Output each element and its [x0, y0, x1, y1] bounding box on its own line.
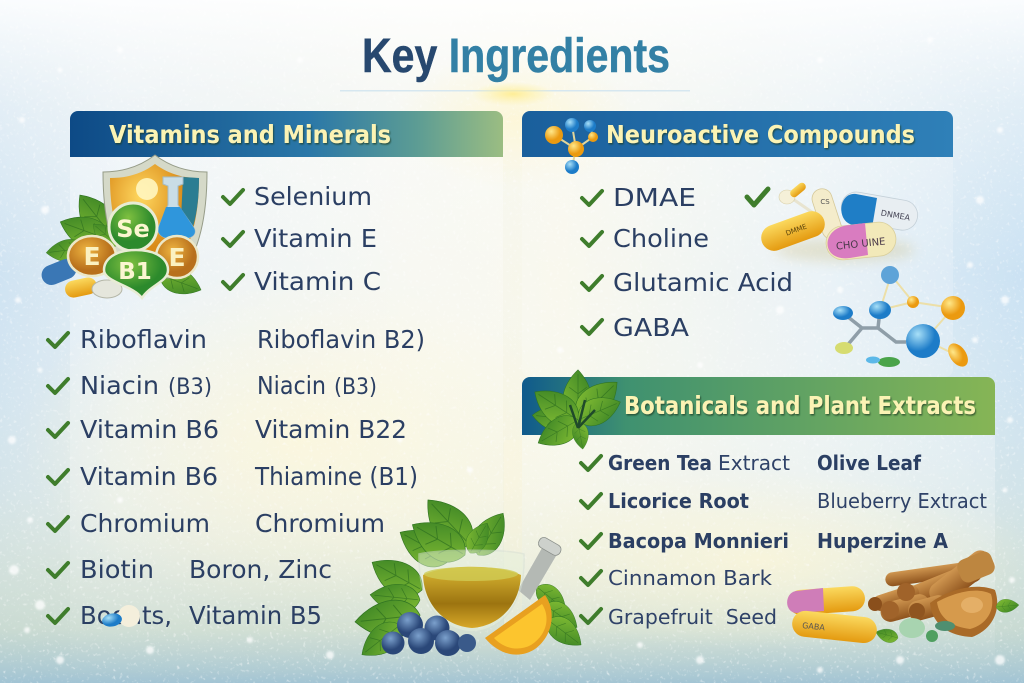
checklist: neuroactive: DMAE: [613, 183, 696, 212]
icon: capsules: CHO UINE: [835, 236, 886, 253]
heading: neuroactive compounds: Neuroactive Compounds: [606, 120, 915, 149]
small capsule over text: [101, 605, 140, 628]
checklist: botanicals right: Olive Leaf: [817, 451, 921, 475]
checklist: right column vitamins: (B3): [334, 375, 377, 400]
icon: green tea with blueberries and orange: [353, 489, 589, 666]
checklist: right column vitamins: Vitamin B5: [189, 601, 322, 630]
icon: vitamin shield and coins: E: [168, 243, 186, 272]
panel header: botanicals: [522, 377, 995, 435]
checklist: right column vitamins: Riboflavin B2): [257, 325, 425, 354]
icon: header molecule: [545, 118, 598, 174]
heading: vitamins and minerals: Vitamins and Minerals: [109, 120, 391, 149]
checklist: right column vitamins: Boron, Zinc: [189, 555, 332, 584]
icon: vitamin shield and coins: [39, 155, 207, 301]
checklist: right column vitamins: Vitamin B22: [255, 415, 407, 444]
checklist: left column vitamins: Biotin: [80, 555, 154, 584]
checklist: left column vitamins: Vitamin B6: [80, 462, 218, 491]
checklist: right column vitamins: Thiamine (B1): [254, 462, 418, 491]
checklist: top vitamins: Vitamin C: [254, 267, 381, 296]
checklist: neuroactive: [582, 183, 793, 342]
icon: capsules: [758, 181, 920, 262]
checklist: botanicals left: Cinnamon Bark: [608, 566, 772, 590]
icon: header leaves: [526, 370, 627, 455]
panel: neuroactive compounds: [522, 111, 972, 377]
extra check mark: [747, 189, 768, 205]
icon: vitamin shield and coins: Se: [116, 215, 150, 243]
checklist: botanicals left: Bacopa Monnieri: [608, 529, 789, 553]
checklist: left column vitamins: Vitamin B6: [80, 415, 219, 444]
checklist: left column vitamins: Riboflavin: [80, 325, 207, 354]
checklist: left column vitamins: Chromium: [80, 509, 210, 538]
panel header: neuroactive: [522, 111, 953, 157]
checklist: botanicals right: Huperzine A: [817, 529, 948, 553]
panel header: vitamins: [70, 111, 503, 157]
checklist: neuroactive: GABA: [613, 313, 689, 342]
checklist: botanicals left: Green Tea: [608, 451, 712, 475]
panel: botanicals and plant extracts: [522, 370, 1019, 683]
icon: capsules: DMME: [785, 223, 808, 238]
checklist: right column vitamins: Chromium: [255, 509, 385, 538]
checklist: left column vitamins: [48, 325, 219, 630]
icon: cinnamon, orange and capsules: [787, 546, 1019, 645]
checklist: top vitamins: Vitamin E: [254, 224, 377, 253]
checklist: left column vitamins: Boonts,: [80, 601, 172, 630]
title divider glow: [340, 82, 690, 106]
checklist: top vitamins: [223, 182, 381, 296]
checklist: right column vitamins: [189, 325, 425, 630]
icon: capsules: DNMEA: [880, 209, 911, 223]
checklist: right column vitamins: Niacin: [257, 371, 326, 400]
checklist: neuroactive: Glutamic Acid: [613, 268, 793, 297]
panel: vitamins and minerals: [39, 111, 522, 683]
icon: vitamin shield and coins: E: [83, 242, 101, 271]
icon: molecule: [833, 266, 972, 370]
checklist: left column vitamins: (B3): [168, 375, 212, 400]
checklist: neuroactive: Choline: [613, 224, 709, 253]
icon: vitamin shield and coins: B1: [118, 259, 152, 285]
checklist: top vitamins: Selenium: [254, 182, 372, 211]
checklist: left column vitamins: Niacin: [80, 371, 159, 400]
checklist: botanicals left: Extract: [718, 451, 790, 475]
checklist: botanicals right: Blueberry Extract: [817, 489, 987, 513]
checklist: botanicals left: [581, 451, 790, 629]
icon: cinnamon, orange and capsules: GABA: [802, 621, 826, 632]
checklist: botanicals right: [817, 451, 987, 553]
title: Key Ingredients: [362, 30, 670, 83]
checklist: botanicals left: Licorice Root: [608, 489, 749, 513]
checklist: botanicals left: Grapefruit Seed: [608, 605, 777, 629]
icon: capsules: CS: [820, 198, 830, 206]
